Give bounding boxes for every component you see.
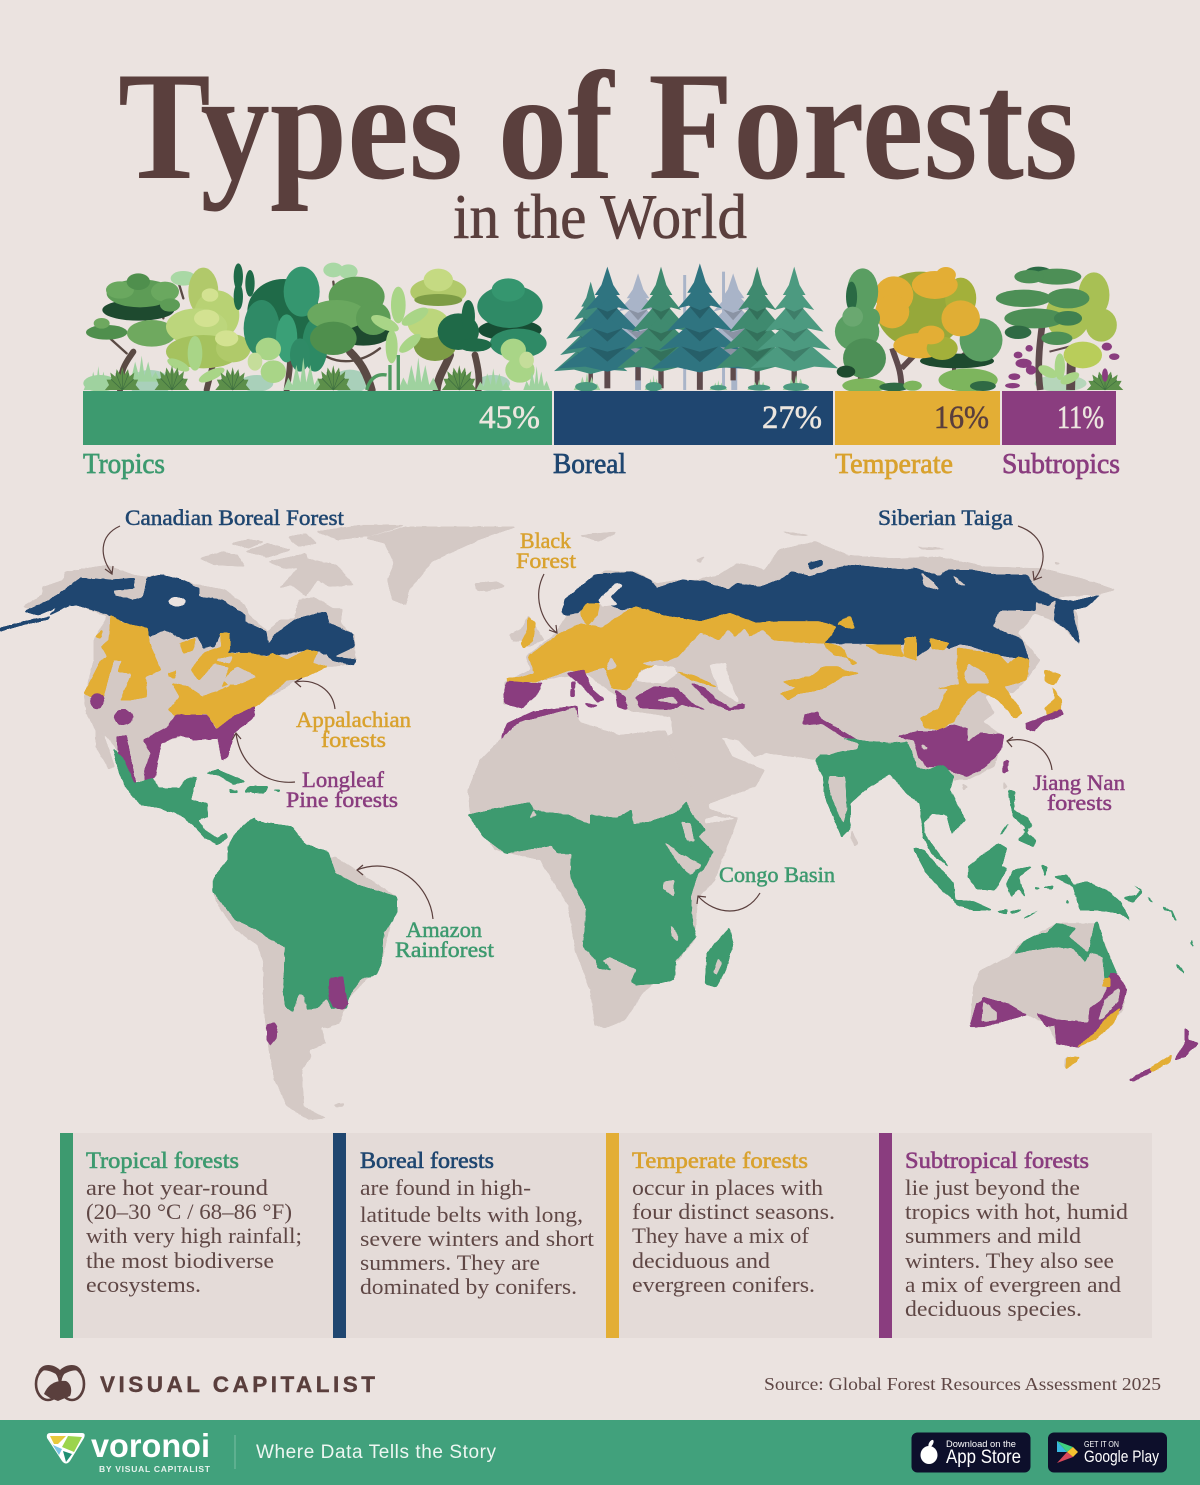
map: south america [213, 818, 396, 1120]
category labels: Tropics [83, 449, 165, 480]
callout: Amazon Rainforest [357, 865, 494, 962]
bar: boreal [554, 391, 833, 445]
map: south asia and oceania [815, 738, 1198, 1082]
panel: temperate forests: They have a mix of [632, 1223, 810, 1248]
panel: boreal forests: severe winters and short [360, 1226, 595, 1251]
illustration: boreal trees [554, 263, 838, 391]
panel: boreal forests [333, 1133, 606, 1338]
bar: tropics [83, 391, 552, 445]
callout: Siberian Taiga [878, 505, 1043, 580]
bar: temperate [835, 391, 1000, 445]
tagline: Where Data Tells the Story [256, 1442, 496, 1463]
panel: tropical forests [60, 1133, 333, 1338]
source note: Source: Global Forest Resources Assessment 2025 [764, 1374, 1161, 1394]
callout: Canadian Boreal Forest: Canadian Boreal Forest [125, 505, 344, 530]
bar: tropics: 45% [479, 400, 540, 436]
callout: Congo Basin: Congo Basin [719, 862, 835, 887]
map: eurasia [501, 530, 1116, 820]
badge: App Store [912, 1432, 1030, 1472]
callout: Jiang Nan forests: forests [1047, 790, 1112, 815]
callout: Longleaf Pine forests [232, 733, 398, 812]
callout: Jiang Nan forests [1007, 737, 1125, 815]
panel: temperate forests: four distinct seasons. [632, 1199, 835, 1224]
callout: Longleaf Pine forests: Longleaf [302, 767, 385, 792]
callout: Appalachian forests: Appalachian [296, 707, 411, 732]
panel: temperate forests: Temperate forests [632, 1148, 808, 1173]
world map [0, 525, 1198, 1120]
footer band [0, 1420, 1200, 1485]
panel: temperate forests: occur in places with [632, 1175, 823, 1200]
subtitle: in the World [453, 181, 747, 252]
panel: subtropical forests [879, 1133, 1152, 1338]
category labels [83, 449, 1120, 480]
logo: voronoi [47, 1427, 211, 1474]
panel: boreal forests: latitude belts with long, [360, 1202, 583, 1227]
panel: tropical forests: the most biodiverse [86, 1248, 274, 1273]
bar: temperate: 16% [934, 400, 989, 436]
badge: Google Play [1048, 1432, 1167, 1472]
category labels: Temperate [835, 449, 953, 480]
category labels: Boreal [553, 449, 626, 480]
bar: subtropics: 11% [1057, 400, 1104, 436]
panel: subtropical forests: lie just beyond the [905, 1175, 1080, 1200]
badge: Google Play: Google Play [1084, 1447, 1159, 1466]
bar: boreal: 27% [762, 400, 822, 436]
panel: subtropical forests: Subtropical forests [905, 1148, 1089, 1173]
panel: subtropical forests: a mix of evergreen and [905, 1272, 1121, 1297]
panel: boreal forests: dominated by conifers. [360, 1274, 577, 1299]
logo: Visual Capitalist [36, 1365, 375, 1401]
panel: boreal forests: Boreal forests [360, 1148, 494, 1173]
callout: Longleaf Pine forests: Pine forests [286, 787, 398, 812]
panel: subtropical forests: deciduous species. [905, 1296, 1082, 1321]
panel: tropical forests: ecosystems. [86, 1272, 201, 1297]
callout: Siberian Taiga: Siberian Taiga [878, 505, 1013, 530]
callout: Amazon Rainforest: Amazon [406, 917, 482, 942]
category labels: Subtropics [1002, 449, 1120, 480]
callout: Canadian Boreal Forest [103, 505, 344, 574]
callout: Appalachian forests [295, 678, 411, 752]
badge: App Store: Download on the [946, 1439, 1016, 1450]
panel: tropical forests: with very high rainfall; [86, 1223, 302, 1248]
callout: Black Forest [516, 528, 576, 633]
illustration: subtropical trees [996, 267, 1123, 392]
illustration: temperate trees [835, 267, 1003, 393]
map: australia [970, 922, 1198, 1082]
callout: Black Forest: Forest [516, 548, 576, 573]
bar chart: forest share [83, 391, 1116, 445]
logo: voronoi: BY VISUAL CAPITALIST [99, 1464, 211, 1474]
logo: voronoi: voronoi [91, 1427, 210, 1464]
badge: App Store: App Store [946, 1447, 1021, 1468]
map: central america [113, 748, 228, 845]
illustration: tropical trees [83, 263, 550, 397]
panel: tropical forests: are hot year-round [86, 1175, 268, 1200]
badge: Google Play: GET IT ON [1084, 1439, 1119, 1449]
panel: temperate forests [606, 1133, 879, 1338]
panel: tropical forests: Tropical forests [86, 1148, 239, 1173]
bar: subtropics [1002, 391, 1116, 445]
logo: Visual Capitalist: VISUAL CAPITALIST [100, 1372, 375, 1397]
panel: temperate forests: deciduous and [632, 1248, 770, 1273]
callout: Jiang Nan forests: Jiang Nan [1033, 770, 1125, 795]
map: africa [213, 708, 738, 1120]
panel: boreal forests: summers. They are [360, 1250, 540, 1275]
callout: Black Forest: Black [520, 528, 571, 553]
map: north america [0, 525, 524, 793]
panel: tropical forests: (20–30 °C / 68–86 °F) [86, 1199, 292, 1224]
panel: temperate forests: evergreen conifers. [632, 1272, 815, 1297]
panel: subtropical forests: tropics with hot, humid [905, 1199, 1128, 1224]
panel: subtropical forests: winters. They also see [905, 1248, 1114, 1273]
callout: Congo Basin [697, 862, 835, 911]
panel: subtropical forests: summers and mild [905, 1223, 1081, 1248]
callout: Amazon Rainforest: Rainforest [395, 937, 494, 962]
title: Types of Forests [118, 40, 1078, 212]
callout: Appalachian forests: forests [321, 727, 386, 752]
panel: boreal forests: are found in high- [360, 1175, 531, 1200]
